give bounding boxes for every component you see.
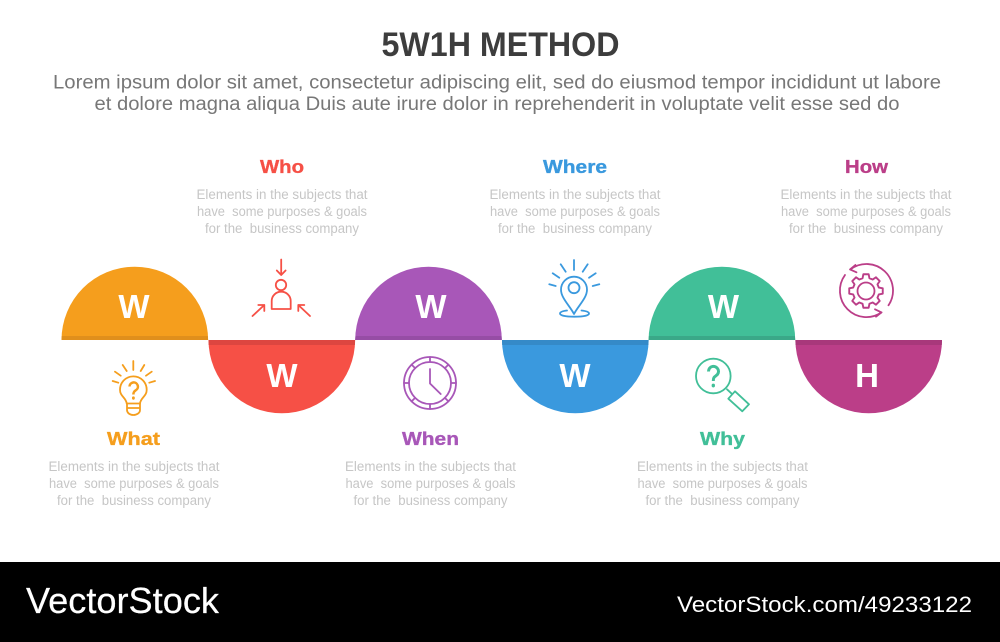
text block: how: Elements in the subjects that bbox=[780, 187, 952, 202]
text block: what: Elements in the subjects that bbox=[48, 459, 220, 474]
subtitle bbox=[53, 72, 941, 115]
text block: why: for the business company bbox=[646, 493, 800, 508]
watermark footer bar: VectorStock bbox=[26, 580, 220, 621]
watermark footer bar bbox=[0, 562, 1000, 642]
text block: how bbox=[780, 187, 952, 236]
text block: when: for the business company bbox=[354, 493, 508, 508]
text block: where bbox=[490, 187, 661, 236]
icon: clock bbox=[404, 357, 456, 409]
panel: why semicircle bbox=[649, 267, 795, 340]
panel: what semicircle bbox=[62, 267, 208, 340]
text block: what bbox=[48, 459, 220, 508]
heading: how: How bbox=[845, 156, 889, 177]
panel: how semicircle: H bbox=[855, 357, 879, 394]
panel: when semicircle: W bbox=[415, 288, 447, 325]
text block: why: have some purposes & goals bbox=[638, 476, 808, 491]
title: 5W1H METHOD bbox=[382, 26, 620, 64]
text block: how: for the business company bbox=[789, 221, 943, 236]
panel: where semicircle: W bbox=[559, 357, 591, 394]
text block: what: have some purposes & goals bbox=[49, 476, 219, 491]
icon: person with inward arrows bbox=[252, 260, 310, 316]
text block: when bbox=[345, 459, 516, 508]
icon: light bulb with question mark bbox=[113, 361, 155, 415]
watermark footer bar: VectorStock.com/49233122 bbox=[677, 592, 972, 617]
icon: location pin with rays bbox=[549, 260, 599, 317]
text block: why bbox=[637, 459, 808, 508]
text block: how: have some purposes & goals bbox=[781, 204, 951, 219]
icon: magnifier with question mark bbox=[696, 359, 749, 411]
text block: who: for the business company bbox=[205, 221, 359, 236]
heading: what: What bbox=[107, 428, 160, 449]
text block: who bbox=[196, 187, 368, 236]
panel: where semicircle bbox=[502, 340, 649, 413]
text block: when: have some purposes & goals bbox=[346, 476, 516, 491]
panel: how semicircle bbox=[795, 340, 942, 413]
subtitle: et dolore magna aliqua Duis aute irure dolor in reprehenderit in voluptate velit esse sed do bbox=[94, 94, 899, 115]
heading: why: Why bbox=[700, 428, 746, 449]
heading: where: Where bbox=[543, 156, 607, 177]
heading: when: When bbox=[402, 428, 459, 449]
text block: who: Elements in the subjects that bbox=[196, 187, 368, 202]
panel: what semicircle: W bbox=[118, 288, 150, 325]
text block: when: Elements in the subjects that bbox=[345, 459, 516, 474]
subtitle: Lorem ipsum dolor sit amet, consectetur adipiscing elit, sed do eiusmod tempor incididunt ut labore bbox=[53, 72, 941, 94]
text block: what: for the business company bbox=[57, 493, 211, 508]
panel: when semicircle bbox=[355, 267, 502, 340]
panel: who semicircle: W bbox=[266, 357, 298, 394]
icon: gear with cycle arrows bbox=[840, 264, 893, 317]
text block: where: Elements in the subjects that bbox=[490, 187, 661, 202]
heading: who: Who bbox=[260, 156, 304, 177]
panel: who semicircle bbox=[208, 340, 355, 413]
text block: where: have some purposes & goals bbox=[490, 204, 660, 219]
text block: where: for the business company bbox=[498, 221, 652, 236]
text block: why: Elements in the subjects that bbox=[637, 459, 808, 474]
text block: who: have some purposes & goals bbox=[197, 204, 367, 219]
panel: why semicircle: W bbox=[708, 288, 740, 325]
